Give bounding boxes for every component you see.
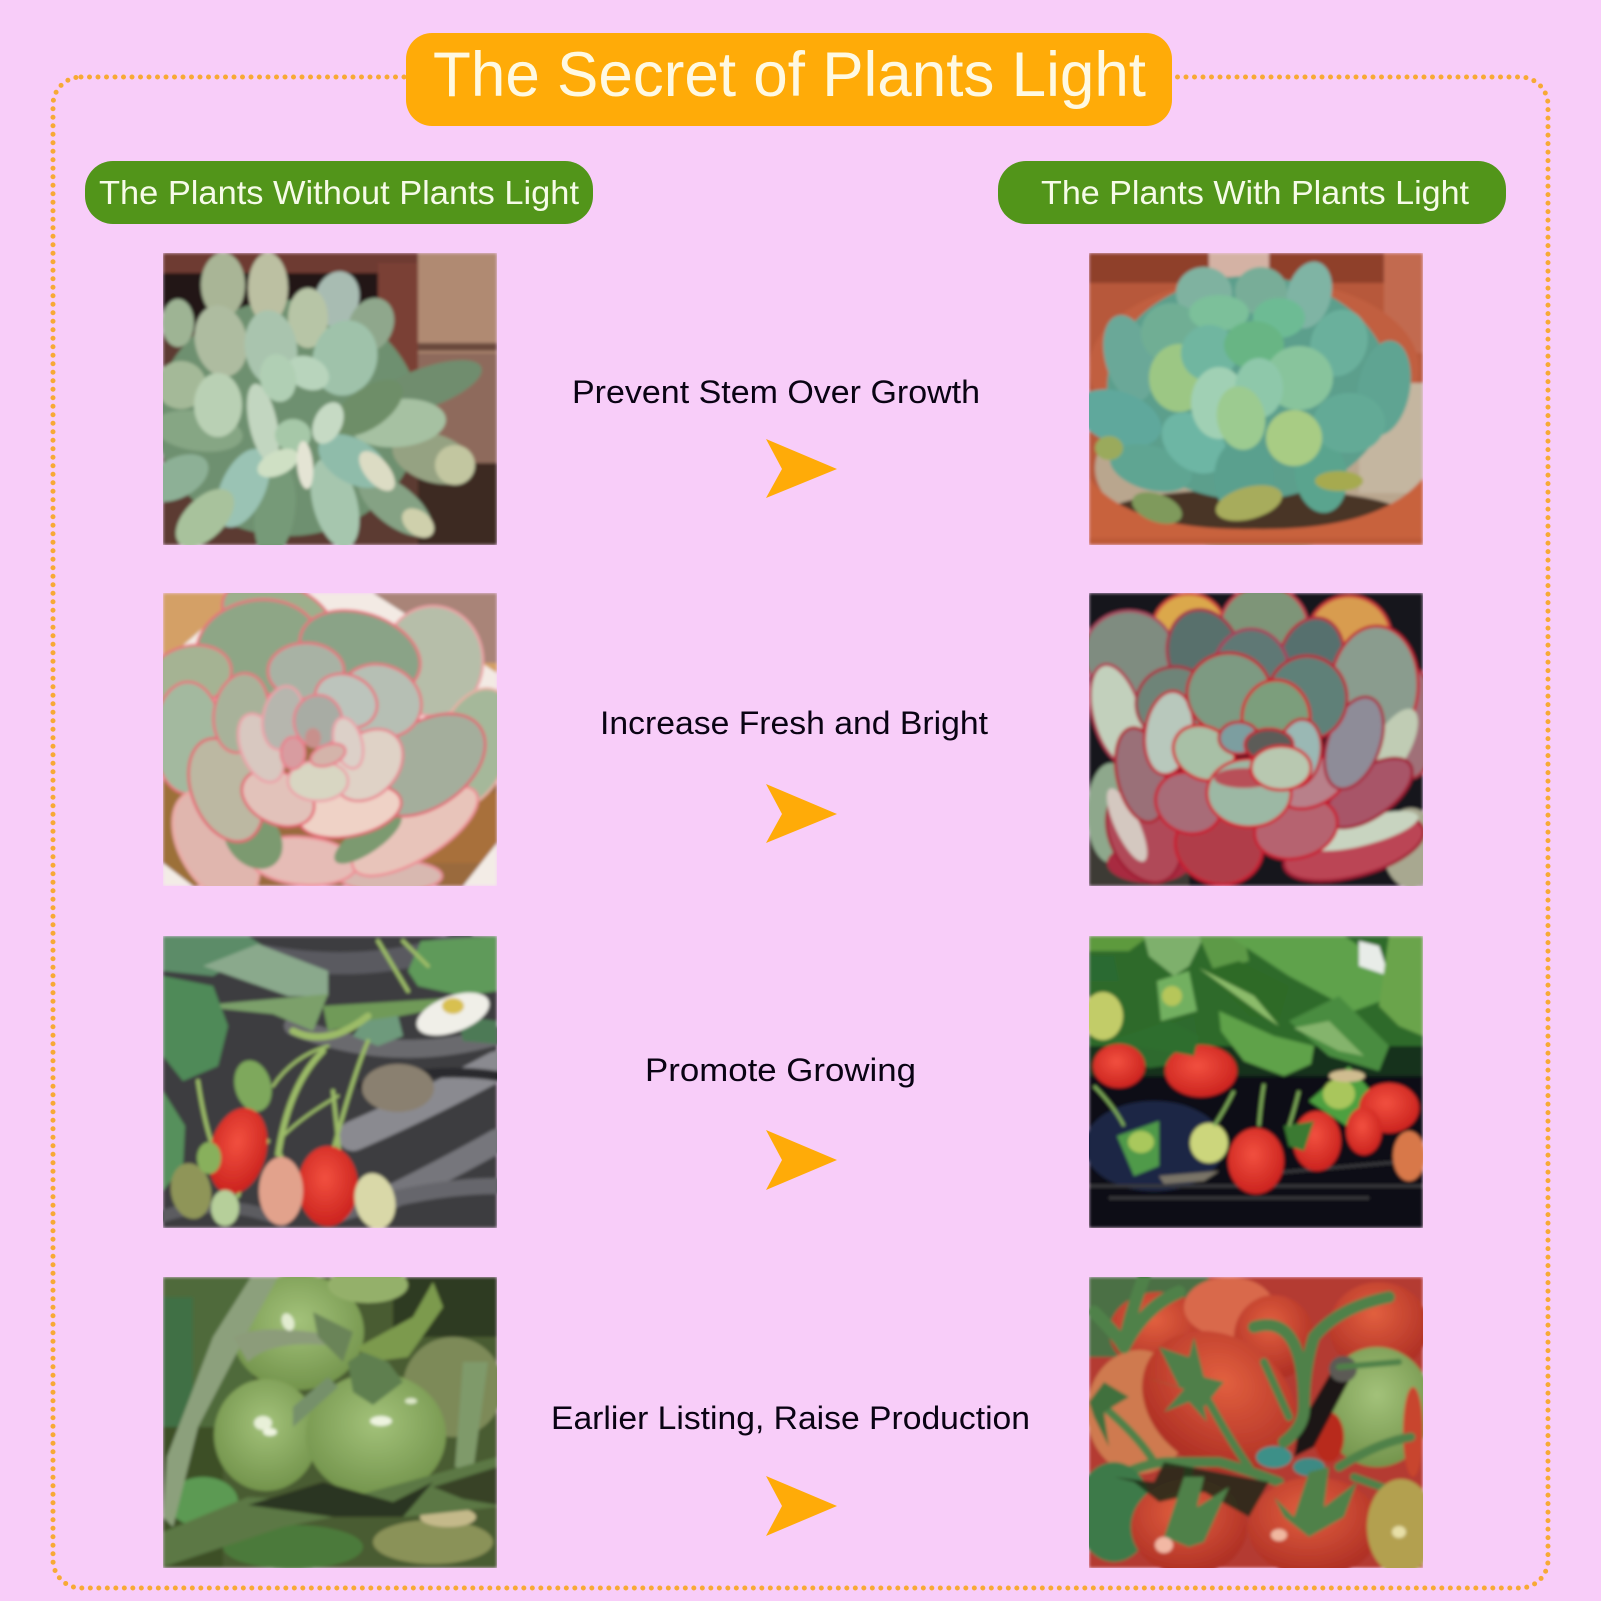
- title: The Secret of Plants Light: [433, 40, 1146, 110]
- photo: strawberries without light: [163, 936, 497, 1228]
- heading: without plants light: [85, 161, 593, 224]
- arrow 3: [766, 1130, 837, 1190]
- arrow 2: [766, 784, 837, 843]
- label: earlier listing, raise production: Earlier Listing, Raise Production: [551, 1400, 1030, 1436]
- arrow 4: [766, 1476, 837, 1536]
- arrow 1: [766, 439, 837, 498]
- heading: without plants light: The Plants Without Plants Light: [99, 174, 579, 211]
- photo: red tomatoes with light: [1089, 1277, 1423, 1568]
- photo: green tomatoes without light: [163, 1277, 497, 1568]
- photo: pale succulent without light: [163, 253, 497, 545]
- photo: crimson-edged succulent with light: [1089, 593, 1423, 886]
- label: promote growing: Promote Growing: [645, 1052, 916, 1088]
- photo: pink-edged succulent without light: [163, 593, 497, 886]
- label: increase fresh and bright: Increase Fresh and Bright: [600, 705, 988, 741]
- heading: with plants light: [998, 161, 1506, 224]
- photo: strawberries with light: [1089, 936, 1423, 1228]
- heading: with plants light: The Plants With Plants Light: [1041, 174, 1469, 211]
- label: prevent stem over growth: Prevent Stem Over Growth: [572, 374, 980, 410]
- photo: green-blue succulent with light: [1089, 253, 1423, 545]
